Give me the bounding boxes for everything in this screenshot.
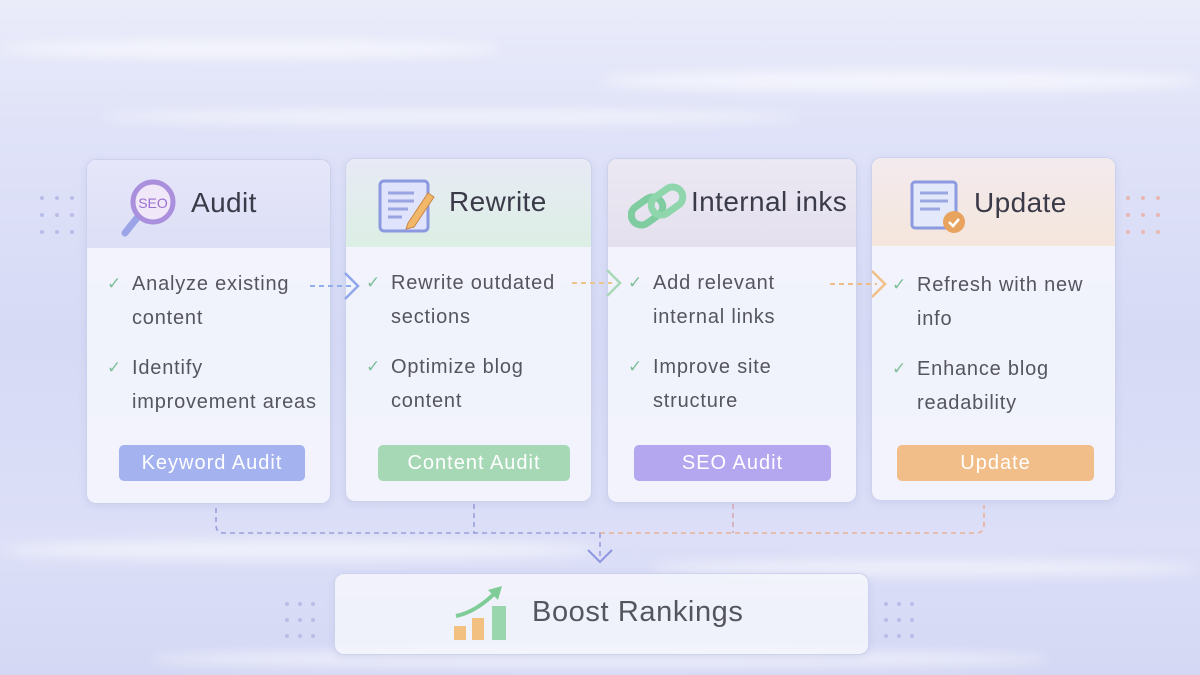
heading: boost rankings: Boost Rankings [532, 596, 744, 628]
panel: internal links: Improve site [653, 356, 772, 378]
panel: internal links [607, 158, 857, 503]
panel: audit: ✓ [107, 358, 121, 377]
panel: boost rankings [334, 573, 869, 655]
bullets: content [132, 307, 203, 329]
panel: update: ✓ [892, 275, 906, 294]
panel: internal links: internal links [653, 306, 775, 328]
button: keyword audit: Keyword Audit [142, 452, 282, 474]
icon: document check [910, 180, 965, 233]
icon: seo magnifier: SEO [138, 195, 168, 211]
panel: rewrite: sections [391, 306, 471, 328]
arrow: internal links to update [830, 271, 885, 297]
panel: rewrite: ✓ [366, 273, 380, 292]
panel: update [871, 157, 1116, 501]
button: keyword audit [119, 445, 305, 481]
icon: growth chart [454, 586, 506, 640]
panel: internal links: structure [653, 390, 738, 412]
panel: internal links: ✓ [628, 273, 642, 292]
panel: update: readability [917, 392, 1017, 414]
icon: document pencil [378, 180, 435, 232]
panel: rewrite [345, 158, 592, 502]
icon: chain link [628, 184, 686, 228]
icon: seo magnifier [122, 180, 176, 236]
panel: rewrite: content [391, 390, 462, 412]
button: content audit [378, 445, 570, 481]
panel: audit: improvement areas [132, 391, 317, 413]
panel: update: Enhance blog [917, 358, 1049, 380]
heading: internal inks: Internal inks [691, 186, 847, 217]
button: seo audit: SEO Audit [682, 452, 783, 474]
panel: rewrite: Rewrite outdated [391, 272, 555, 294]
heading: update: Update [974, 187, 1067, 218]
panel: rewrite: Optimize blog [391, 356, 524, 378]
button: update: Update [960, 452, 1031, 474]
arrow: rewrite to internal links [572, 270, 620, 296]
panel: update: Refresh with new [917, 274, 1083, 296]
panel: update: ✓ [892, 359, 906, 378]
panel: internal links: Add relevant [653, 272, 775, 294]
bullets [107, 273, 289, 329]
bullets: Analyze existing [132, 273, 289, 295]
button: seo audit [634, 445, 831, 481]
panel: rewrite: ✓ [366, 357, 380, 376]
arrow: audit to rewrite [310, 273, 358, 299]
decorative dots [40, 196, 914, 638]
heading: rewrite: Rewrite [449, 186, 547, 217]
button: content audit: Content Audit [407, 452, 541, 474]
arrow: down [588, 550, 612, 562]
panel: audit [86, 159, 331, 504]
panel: internal links: ✓ [628, 357, 642, 376]
button: update [897, 445, 1094, 481]
heading: audit: Audit [191, 187, 257, 218]
bullets: ✓ [107, 274, 121, 293]
panel: update: info [917, 308, 952, 330]
panel: audit: Identify [132, 357, 203, 379]
connector lines to boost [216, 504, 984, 560]
